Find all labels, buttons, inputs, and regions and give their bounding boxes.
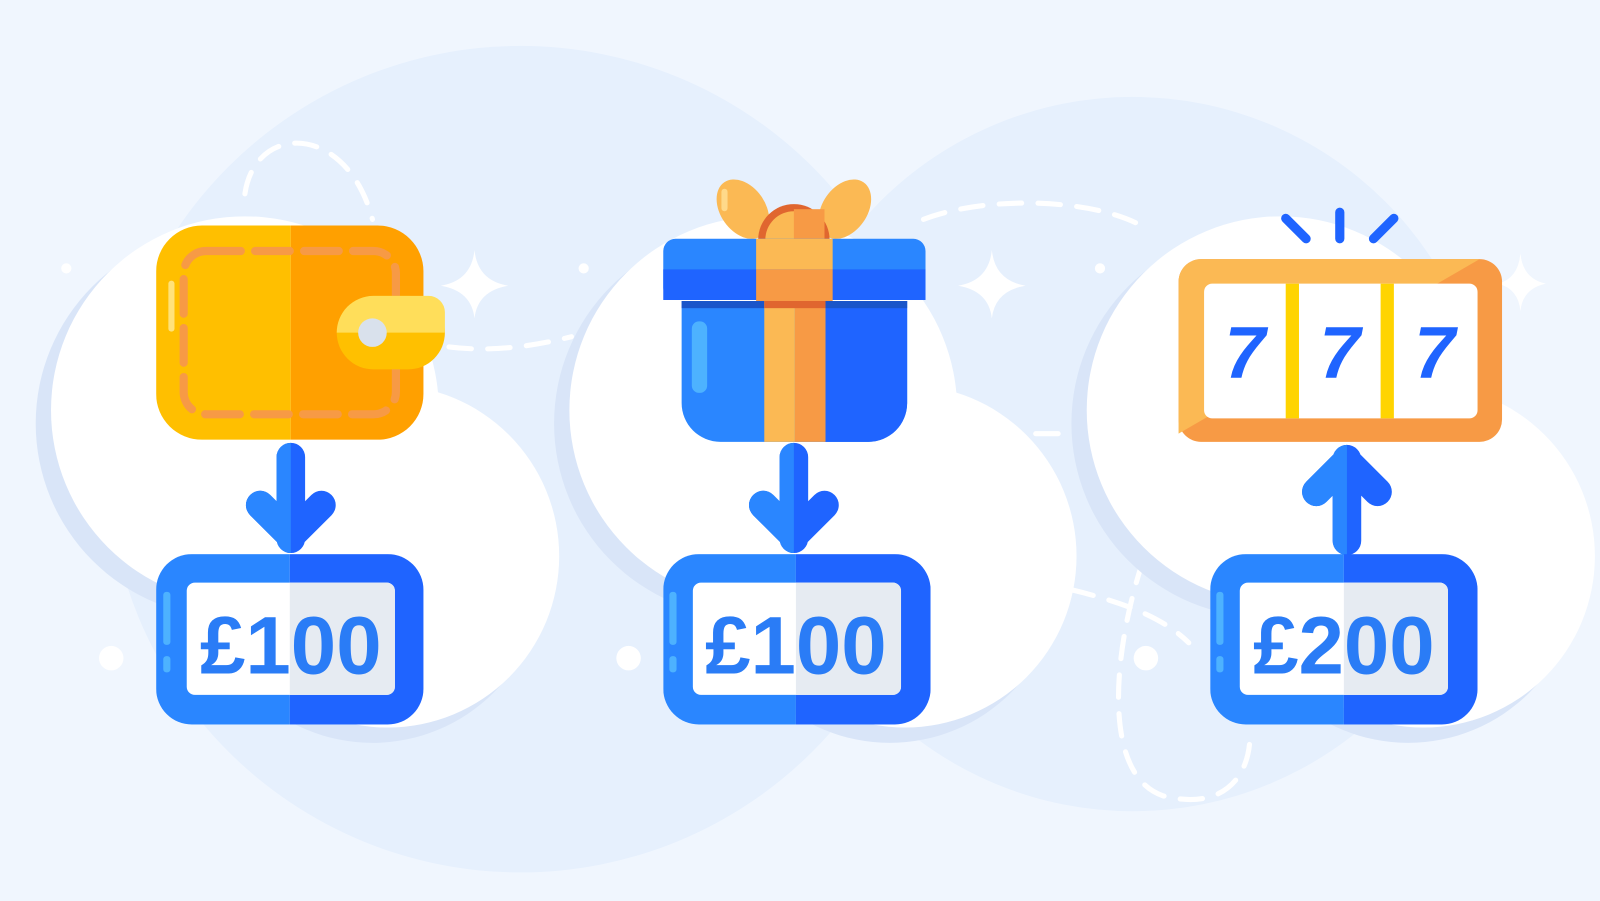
money box: £100 middle: £100: [705, 600, 887, 691]
arrow: gift down: [763, 457, 824, 539]
icon: gift: [663, 170, 926, 442]
arrow: wallet down: [260, 457, 321, 539]
cloud: left: [36, 216, 559, 743]
icon: slot machine: 7: [1414, 311, 1458, 394]
money box: £200: £200: [1253, 600, 1435, 691]
money box: £200: [1210, 554, 1478, 724]
money box: £100 middle: [663, 554, 931, 724]
cloud: right: [1071, 216, 1595, 743]
icon: wallet: [156, 226, 445, 440]
arrow: slot up: [1316, 459, 1378, 541]
icon: slot machine: [1179, 212, 1502, 442]
icon: slot machine: 7: [1319, 311, 1363, 394]
sparkles: [61, 250, 1546, 670]
money box: £100 left: £100: [200, 600, 382, 691]
dashed decorative path: [245, 143, 1250, 800]
cloud: middle: [554, 216, 1077, 743]
money box: £100 left: [156, 554, 423, 724]
icon: slot machine: 7: [1224, 311, 1268, 394]
background circles: [107, 46, 1490, 872]
